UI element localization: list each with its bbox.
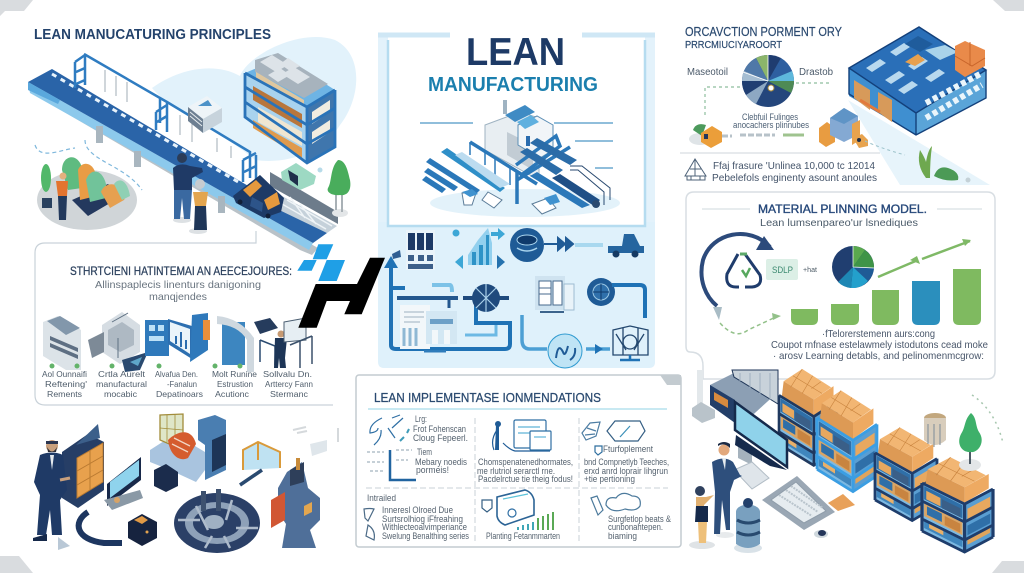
status box: SDLP <box>772 265 793 275</box>
note text <box>712 160 877 184</box>
captions <box>42 369 313 399</box>
pie chart <box>832 246 874 288</box>
conveyor belt <box>28 69 327 255</box>
main title: LEAN <box>466 31 565 74</box>
panel heading: STHRTCIENI HATINTEMAI AN AEECEJOURES: <box>70 264 292 278</box>
pie caption: Clebfuil Fulinges <box>742 112 798 122</box>
cell text: Lrg: <box>415 414 427 424</box>
panel title: LEAN IMPLEMENTASE IONMENDATIONS <box>374 391 601 405</box>
machine row <box>43 312 312 372</box>
cell text: Swelung Benalthing series <box>382 531 469 541</box>
cell text: Tiem <box>417 447 432 457</box>
gear valve <box>463 284 509 312</box>
pie labels: Maseotoil <box>687 67 728 78</box>
illustration: warehouse racks and office <box>689 369 1003 553</box>
two workers <box>173 153 208 234</box>
cell text: Intrailed <box>367 493 396 503</box>
right machine <box>240 427 338 548</box>
captions: Sollvalu Dn. <box>263 369 312 379</box>
illustration: office and machines <box>33 414 338 553</box>
captions: Stermanc <box>270 389 309 399</box>
captions: Crtla Aurelt <box>98 369 146 379</box>
gear disc <box>174 489 260 553</box>
cell text: +tie pertioning <box>584 474 635 484</box>
panel subheading: manqjendes <box>149 291 207 303</box>
cell text: Surtsrolhiog iFfreahing <box>382 514 463 524</box>
keyboard <box>762 476 855 538</box>
dotted arc <box>972 395 1003 443</box>
arrows and towers <box>452 228 505 269</box>
pie caption: anocachers plinnubes <box>733 120 809 130</box>
bar chart <box>791 269 981 325</box>
captions: Depatinoars <box>156 389 203 399</box>
panel subtitle: Lean lumsenpareo'ur lsnediques <box>760 217 918 229</box>
panel body text <box>771 329 988 362</box>
panel subheading: Allinspaplecis linenturs danigoning <box>95 279 261 291</box>
documents building <box>400 305 457 352</box>
dashed flow <box>705 83 832 115</box>
gantry frames <box>75 54 256 182</box>
captions: -Fanalun <box>167 379 197 389</box>
pie chart <box>740 55 794 107</box>
logo: blue tiles and black H <box>297 244 385 328</box>
note text: Ffaj frasure 'Unlinea 10,000 tc 12014 <box>713 160 875 172</box>
water drum <box>734 498 762 553</box>
status box: +hat <box>803 267 817 274</box>
note text: Pebelefols enginenty asount anoules <box>712 172 877 184</box>
barrel <box>924 413 946 447</box>
corner triangle tint <box>848 100 990 185</box>
gate icon <box>613 326 648 360</box>
rack three <box>875 427 937 521</box>
cell icons <box>364 415 645 540</box>
cell text: Withlecteoalvimperiance <box>382 522 467 532</box>
captions: mocabic <box>104 389 138 399</box>
grid icon <box>406 230 435 270</box>
tree <box>328 160 350 217</box>
up arrow icon <box>384 250 401 268</box>
green van <box>281 163 322 190</box>
captions: Arttercy Fann <box>265 379 313 389</box>
cell text <box>367 414 671 541</box>
green tree <box>959 413 982 471</box>
captions: Aol Ounnaifi <box>42 369 87 379</box>
pipes left <box>391 268 510 349</box>
cell text: Fturfoplement <box>603 444 653 454</box>
cell text: cunbonahtepen. <box>608 522 663 532</box>
turbine pipe <box>587 278 645 318</box>
boxes pile <box>819 108 905 155</box>
panel: structural <box>35 231 333 405</box>
cell text: Cloug Fepeerl. <box>413 433 468 443</box>
recycling node <box>522 315 610 368</box>
subtitle: MANUFACTURING <box>428 73 598 96</box>
small crate with plant <box>689 124 804 148</box>
cell text: Pacdelrctue tie theig fodus! <box>478 474 573 484</box>
document icon <box>535 276 574 313</box>
pillar and back machine <box>692 370 778 423</box>
cell text: biaming <box>608 531 637 541</box>
cell text: bnd Compnetlyb Teeches, <box>584 457 669 467</box>
warehouse block <box>849 27 986 135</box>
child <box>689 486 715 549</box>
captions: Acutionc <box>215 389 250 399</box>
trend arrow <box>878 239 971 277</box>
pie labels <box>687 67 833 78</box>
captions: Rements <box>47 389 82 399</box>
panel body text: ·fTelorerstemenn aurs:cong <box>822 329 935 340</box>
section subtitle: PRRCMIUCIYAROORT <box>685 39 783 51</box>
pie labels: Drastob <box>799 67 833 78</box>
section title: ORCAVCTION PORMENT ORY <box>685 25 843 39</box>
captions: manufactural <box>96 379 147 389</box>
captions: Estrustion <box>217 379 253 389</box>
icon: triangle building <box>685 159 706 180</box>
captions: Reftening' <box>45 379 87 389</box>
lower tinted area <box>378 222 655 368</box>
panel: central lean manufacturing <box>378 31 655 368</box>
manager <box>712 442 742 538</box>
cell text: Surgfetlop beats & <box>608 514 671 524</box>
small box <box>128 514 157 546</box>
truck <box>233 175 284 218</box>
cell text: me rlutriol serarctl rne. <box>477 466 555 476</box>
panel title: MATERIAL PLINNING MODEL. <box>758 204 927 216</box>
rack two <box>817 390 877 492</box>
panel: lean implementation <box>356 375 681 547</box>
paper stack <box>188 96 222 133</box>
worker with green loads <box>35 140 142 230</box>
cell text: Planting Fetanmmarten <box>486 531 560 541</box>
drum icon <box>510 228 603 262</box>
delivery truck <box>608 234 644 258</box>
monitor <box>104 457 143 510</box>
illustration: production line <box>28 37 356 255</box>
cycle arrow <box>701 234 781 334</box>
status box <box>766 259 817 280</box>
background blob <box>152 37 356 161</box>
panel body text: · arosv Learning detabls, and pelinomenmcgrow: <box>773 351 984 362</box>
title: lean principles: LEAN MANUCATURING PRINCIPLES <box>34 27 271 43</box>
large monitor <box>734 402 787 489</box>
pie caption <box>733 112 809 130</box>
central machine <box>150 414 226 492</box>
cell text: pormeis! <box>416 465 449 475</box>
panel subheading <box>95 279 261 303</box>
cell text: Chomspenatenedhormates, <box>478 457 573 467</box>
cell text: Mebary noedis <box>415 457 467 467</box>
captions: Alvafua Den. <box>155 369 198 379</box>
cell text: erxd anrd loprair Iihgrun <box>584 466 668 476</box>
cell text: Frot Fohenscan <box>413 424 466 434</box>
rack four <box>922 457 993 552</box>
captions: Molt Runine <box>212 369 257 379</box>
recycle triangle <box>727 254 761 287</box>
cell text: Inneresl Olroed Due <box>382 505 453 515</box>
slatted ramp <box>270 172 338 233</box>
rack one <box>779 369 837 465</box>
plants <box>919 146 970 182</box>
top shelf <box>245 53 335 163</box>
section: production inventory <box>680 25 990 185</box>
factory isometric <box>420 100 620 217</box>
curved rail <box>79 512 122 543</box>
flow diagram <box>384 228 648 368</box>
panel: material planning model <box>686 192 995 379</box>
panel body text: Coupot rnfnase estelawmely istodutons cead moke <box>771 340 988 351</box>
manager and cabinet <box>33 424 104 550</box>
